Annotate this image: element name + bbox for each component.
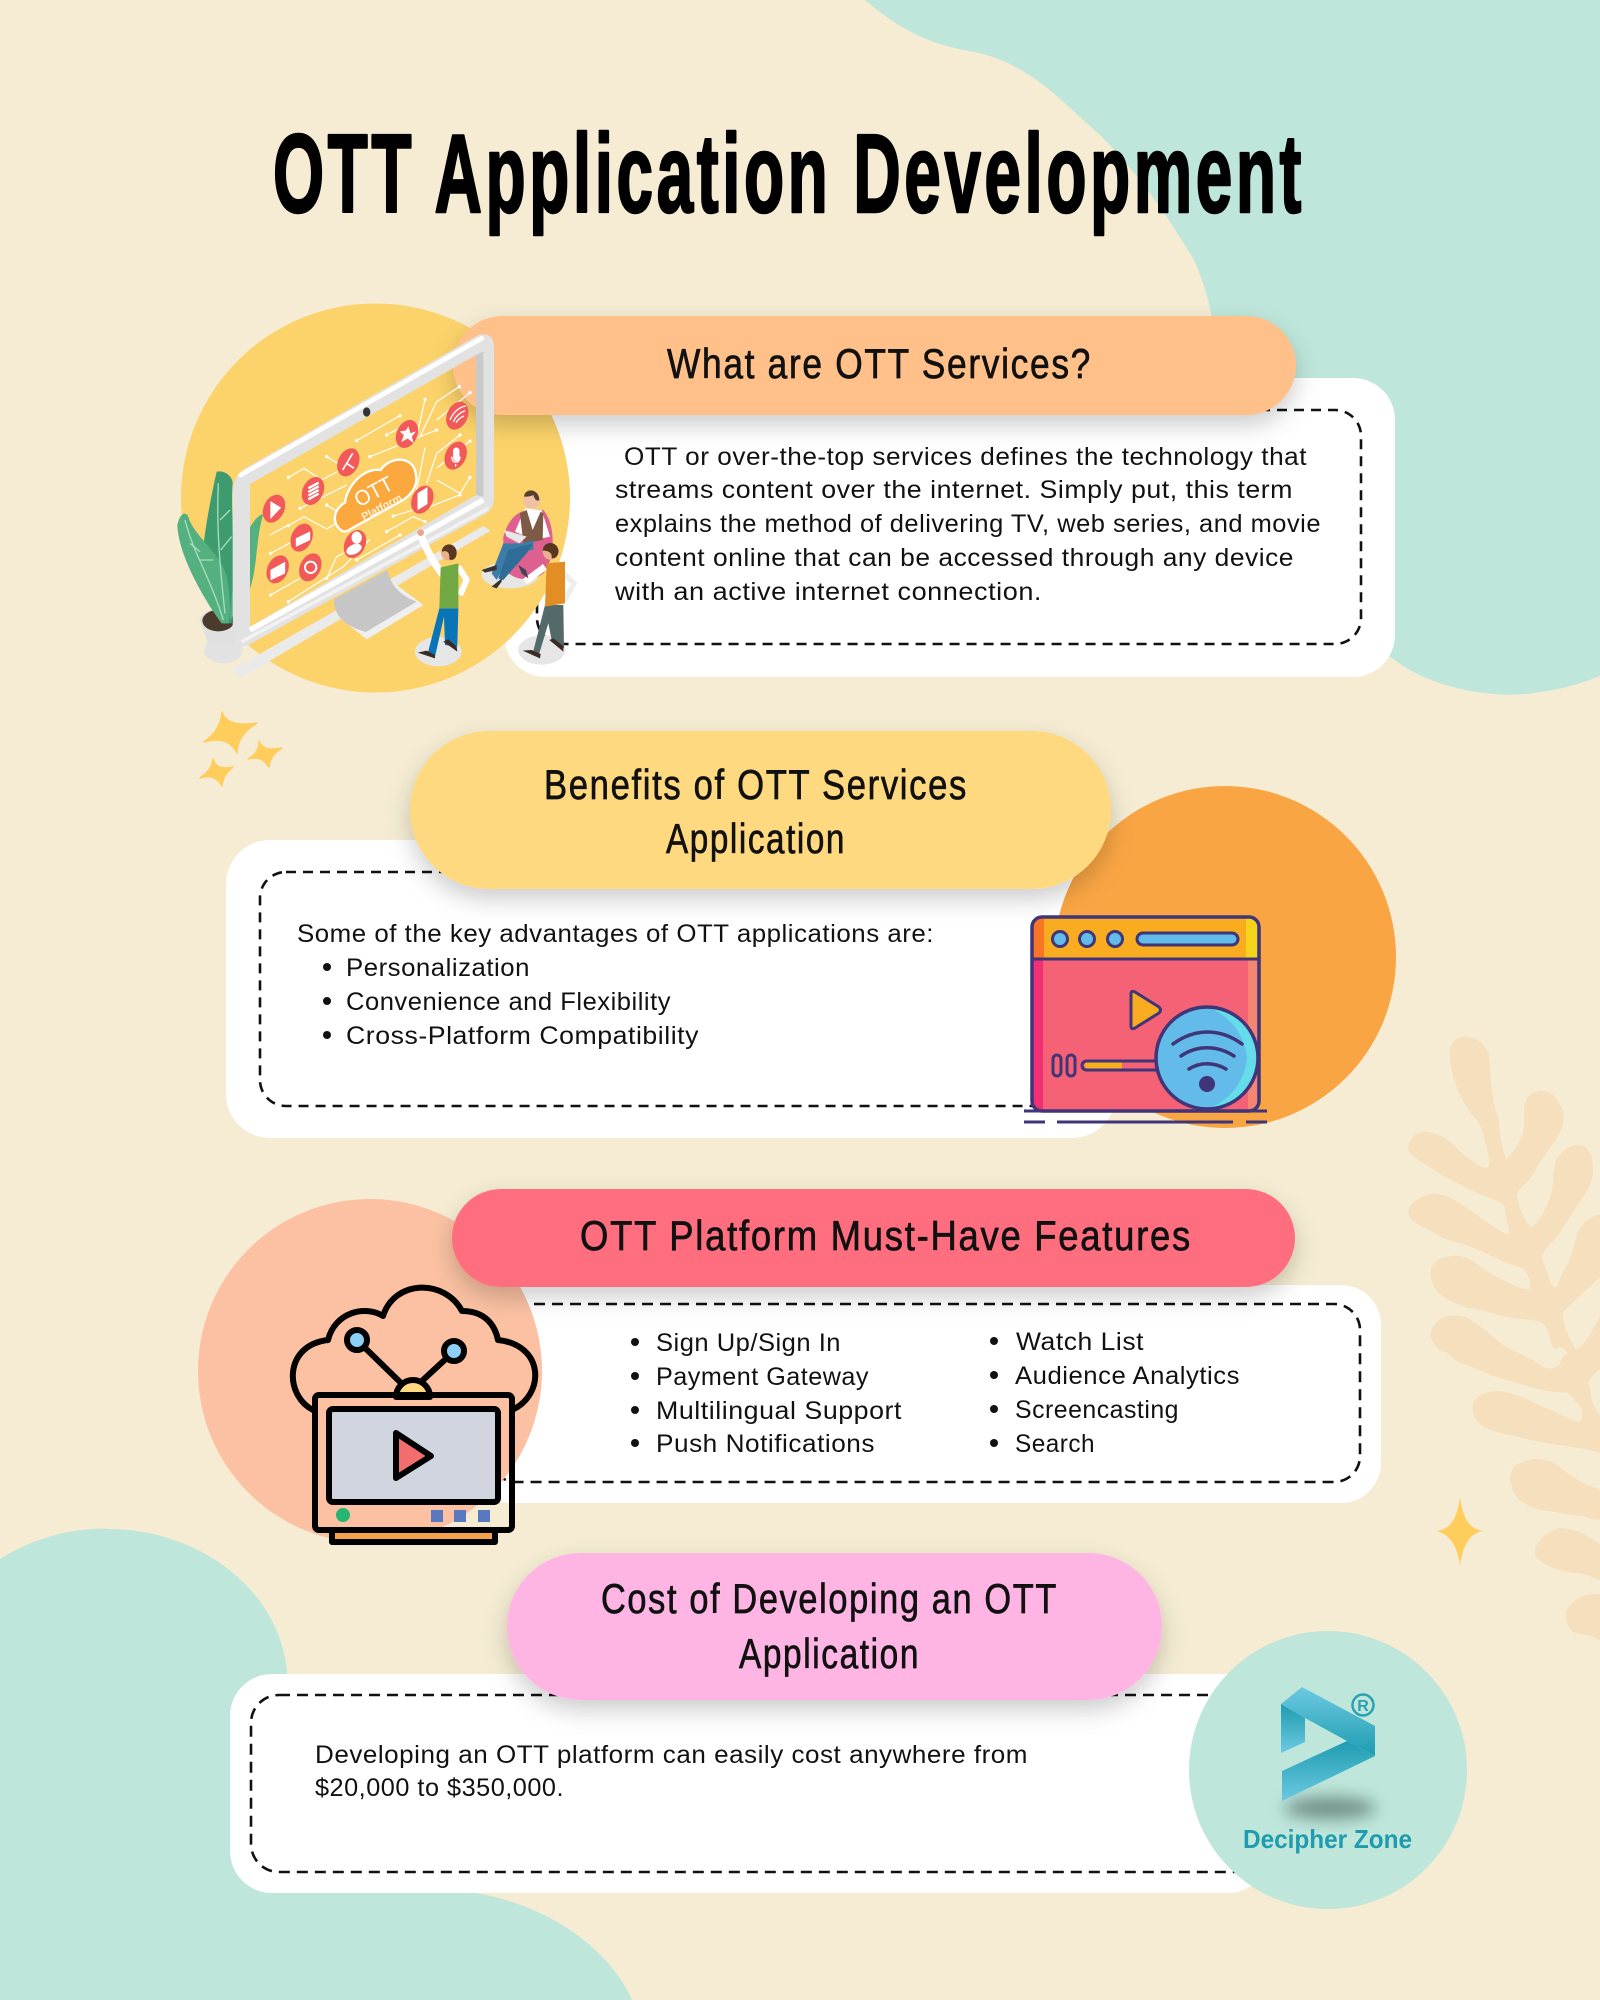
feature list right: Search: [1015, 1430, 1095, 1458]
circuit lines: [270, 387, 470, 602]
cloud label: [348, 471, 404, 523]
feature list left: Push Notifications: [656, 1430, 875, 1458]
body text: Personalization: [346, 954, 530, 982]
dashed frame: [260, 872, 1220, 1106]
feature list left: Sign Up/Sign In: [656, 1329, 841, 1357]
monitor right inner wall: [476, 352, 483, 497]
logo: Decipher Zone: Decipher Zone: [1243, 1824, 1412, 1854]
body text: $20,000 to $350,000.: [315, 1774, 564, 1802]
cloud label: Platform: [360, 492, 404, 523]
circuit dots: [269, 385, 472, 603]
logo: Decipher Zone: [1189, 1631, 1467, 1909]
yellow circle: [181, 304, 570, 692]
dashed frame: [251, 1695, 1261, 1872]
person: orange vest: [518, 543, 574, 665]
body text: Convenience and Flexibility: [346, 988, 671, 1016]
panel: benefits of OTT services application: [226, 731, 1396, 1138]
feature list right: Screencasting: [1015, 1396, 1179, 1424]
screen icon glyphs: [271, 406, 466, 580]
cloud label: OTT: [350, 472, 397, 512]
card: [470, 1285, 1381, 1503]
webcam: [363, 407, 370, 417]
heading: [544, 761, 968, 862]
feature list right: Audience Analytics: [1015, 1362, 1240, 1390]
feature list right: Watch List: [1016, 1328, 1144, 1356]
monitor highlights: [241, 338, 488, 642]
body text: with an active internet connection.: [614, 578, 1042, 606]
monitor desk plate: [232, 526, 491, 677]
heading: Application: [666, 815, 846, 862]
feature list left: Payment Gateway: [656, 1363, 869, 1391]
decorative leaf: [1408, 1037, 1600, 1640]
heading: Benefits of OTT Services: [544, 761, 968, 808]
feature list left: [631, 1329, 902, 1458]
icon: video window with wifi: [1024, 917, 1267, 1122]
body text: explains the method of delivering TV, web series, and movie: [615, 510, 1321, 538]
panel: cost of developing an OTT application: [230, 1553, 1467, 1909]
heading: OTT Platform Must-Have Features: [580, 1212, 1192, 1259]
blob: bottom left teal: [0, 1529, 632, 2000]
heading: Application: [739, 1630, 920, 1677]
cloud: [335, 460, 416, 531]
icon: cloud TV: [293, 1288, 535, 1542]
monitor frame: [233, 334, 494, 646]
heading: [601, 1575, 1058, 1677]
plant: [177, 471, 263, 663]
body text: [297, 920, 934, 1050]
icon: sparkles: [200, 712, 282, 786]
blob: top right teal: [865, 0, 1600, 695]
body text: [315, 1741, 1028, 1802]
body text: [614, 443, 1321, 606]
heading pill: [453, 316, 1296, 415]
illustration: monitor with people: [177, 334, 574, 677]
heading pill: [410, 731, 1111, 889]
heading: Cost of Developing an OTT: [601, 1575, 1058, 1622]
icon: sparkle right: [1437, 1497, 1483, 1565]
dashed frame: [490, 1304, 1360, 1482]
monitor stand: [334, 570, 423, 639]
body text: streams content over the internet. Simply put, this term: [615, 476, 1293, 504]
person: green vest: [415, 529, 467, 666]
panel: what are OTT services: [177, 304, 1395, 692]
body text: Developing an OTT platform can easily cost anywhere from: [315, 1741, 1028, 1769]
card: [226, 840, 1116, 1138]
body text: Cross-Platform Compatibility: [346, 1022, 699, 1050]
heading pill: [452, 1189, 1295, 1287]
feature list right: [990, 1328, 1240, 1458]
card: [230, 1674, 1270, 1893]
heading: What are OTT Services?: [667, 340, 1092, 387]
person: seated with laptop: [482, 490, 553, 588]
screen icons: [258, 398, 473, 587]
heading pill: [507, 1553, 1162, 1700]
logo: Decipher Zone: R: [1357, 1698, 1369, 1715]
feature list left: Multilingual Support: [656, 1397, 902, 1425]
panel: OTT platform must-have features: [198, 1189, 1381, 1543]
orange circle: [1054, 786, 1396, 1128]
card: [504, 378, 1395, 677]
body text: Some of the key advantages of OTT applications are:: [297, 920, 934, 948]
body text: content online that can be accessed through any device: [615, 544, 1294, 572]
body text: OTT or over-the-top services defines the technology that: [624, 443, 1307, 471]
peach circle: [198, 1199, 542, 1543]
dashed frame: [537, 410, 1361, 644]
